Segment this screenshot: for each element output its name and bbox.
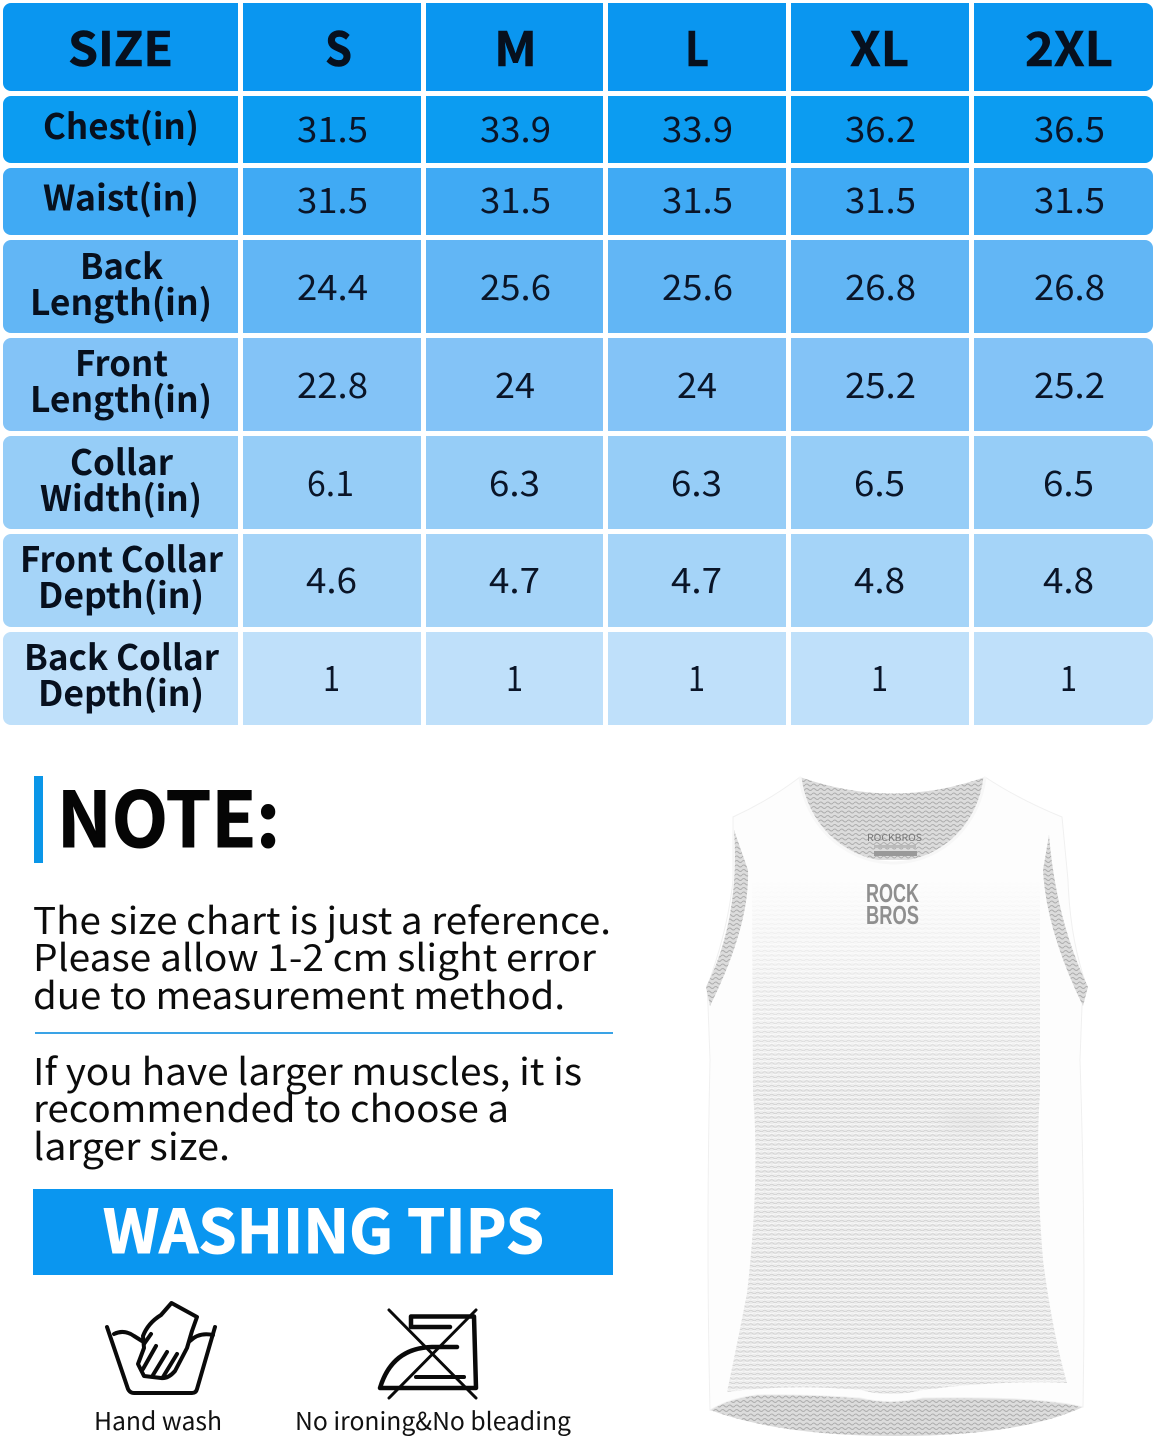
shirt body bbox=[707, 777, 1087, 1410]
row: front length: 24 bbox=[495, 358, 535, 409]
label: no ironing and no bleading: No ironing&No bleading bbox=[295, 1403, 571, 1437]
row: front collar depth: Front Collar bbox=[20, 532, 224, 583]
label: hand wash: Hand wash bbox=[94, 1403, 222, 1437]
size chart table bbox=[3, 3, 1153, 725]
neck tag bbox=[867, 831, 922, 856]
row: collar width: 6.3 bbox=[489, 456, 540, 507]
back inner hem bbox=[710, 1380, 1083, 1436]
header row: M bbox=[494, 11, 537, 80]
row: front length: Front bbox=[75, 336, 168, 387]
row: front collar depth: 4.6 bbox=[306, 553, 357, 604]
row: back collar depth: 1 bbox=[688, 651, 705, 702]
note text: larger muscles bbox=[33, 1042, 582, 1171]
header row: S bbox=[325, 11, 352, 80]
neck tag: ROCKBROS bbox=[867, 831, 922, 844]
row: front length: 25.2 bbox=[845, 358, 916, 409]
row: front length: 24 bbox=[677, 358, 717, 409]
row: chest: 33.9 bbox=[480, 102, 551, 153]
row: back length: 26.8 bbox=[1034, 260, 1105, 311]
row: back collar depth: 1 bbox=[506, 651, 523, 702]
logo bbox=[866, 878, 919, 930]
row: front collar depth: Depth(in) bbox=[38, 568, 204, 619]
row: back length: 25.6 bbox=[480, 260, 551, 311]
row: back length: Length(in) bbox=[30, 275, 212, 326]
armhole mesh left bbox=[706, 830, 748, 1006]
row: chest: 31.5 bbox=[297, 102, 368, 153]
row: collar width bbox=[3, 435, 1153, 529]
note text: larger muscles: larger size. bbox=[33, 1117, 230, 1171]
row: back length: Back bbox=[80, 239, 163, 290]
armhole mesh right bbox=[1043, 835, 1088, 1006]
row: back collar depth: 1 bbox=[323, 651, 340, 702]
mesh centre panel bbox=[727, 880, 1067, 1394]
note text: larger muscles: recommended to choose a bbox=[33, 1079, 509, 1133]
row: back length: 26.8 bbox=[845, 260, 916, 311]
neck inner mesh bbox=[800, 777, 985, 860]
row: back length bbox=[3, 239, 1153, 333]
header row: 2XL bbox=[1025, 11, 1113, 80]
row: back collar depth: Depth(in) bbox=[38, 666, 204, 717]
row: waist: 31.5 bbox=[297, 173, 368, 224]
row: front length bbox=[3, 336, 1153, 431]
row: chest: 33.9 bbox=[662, 102, 733, 153]
row: chest: 36.5 bbox=[1034, 102, 1105, 153]
row: back collar depth: 1 bbox=[1060, 651, 1077, 702]
row: front collar depth: 4.8 bbox=[1043, 553, 1094, 604]
logo: BROS bbox=[866, 900, 919, 930]
note text: measurement error: Please allow 1-2 cm slight error bbox=[33, 928, 597, 982]
row: collar width: 6.3 bbox=[671, 456, 722, 507]
note text: larger muscles: If you have larger muscles, it is bbox=[33, 1042, 582, 1096]
collar edge bbox=[800, 777, 985, 863]
row: back collar depth bbox=[3, 630, 1153, 725]
header row: XL bbox=[850, 11, 909, 80]
row: waist: 31.5 bbox=[1034, 173, 1105, 224]
header row: L bbox=[685, 11, 709, 80]
header row bbox=[3, 3, 1153, 91]
row: back collar depth: Back Collar bbox=[24, 630, 220, 681]
row: chest: 36.2 bbox=[845, 102, 916, 153]
row: front collar depth: 4.7 bbox=[489, 553, 540, 604]
row: front length: 22.8 bbox=[297, 358, 368, 409]
row: front collar depth: 4.8 bbox=[854, 553, 905, 604]
row: back collar depth: 1 bbox=[871, 651, 888, 702]
row: collar width: 6.5 bbox=[1043, 456, 1094, 507]
header row: SIZE bbox=[68, 11, 173, 80]
row: chest bbox=[3, 96, 1153, 163]
note text: measurement error bbox=[33, 891, 611, 1020]
product photo: sleeveless mesh base layer bbox=[706, 777, 1088, 1436]
row: waist: Waist(in) bbox=[43, 170, 199, 222]
icon: hand wash bbox=[107, 1303, 215, 1393]
note text: measurement error: The size chart is just a reference. bbox=[33, 891, 611, 945]
row: collar width: 6.1 bbox=[307, 456, 354, 507]
row: front length: 25.2 bbox=[1034, 358, 1105, 409]
row: collar width: Width(in) bbox=[40, 471, 202, 522]
row: back length: 25.6 bbox=[662, 260, 733, 311]
row: collar width: Collar bbox=[70, 435, 174, 486]
row: waist bbox=[3, 168, 1153, 235]
row: front collar depth: 4.7 bbox=[671, 553, 722, 604]
row: front length: Length(in) bbox=[30, 372, 212, 423]
row: chest: Chest(in) bbox=[43, 99, 199, 150]
row: front collar depth bbox=[3, 532, 1153, 627]
row: waist: 31.5 bbox=[662, 173, 733, 224]
body shading bbox=[940, 1110, 1010, 1130]
note text: measurement error: due to measurement method. bbox=[33, 966, 565, 1020]
logo: ROCK bbox=[866, 878, 919, 908]
note heading: NOTE: bbox=[57, 759, 280, 869]
washing tips banner: WASHING TIPS bbox=[103, 1184, 544, 1271]
row: collar width: 6.5 bbox=[854, 456, 905, 507]
row: waist: 31.5 bbox=[845, 173, 916, 224]
icon: no ironing bbox=[380, 1310, 476, 1398]
row: back length: 24.4 bbox=[297, 260, 368, 311]
row: waist: 31.5 bbox=[480, 173, 551, 224]
